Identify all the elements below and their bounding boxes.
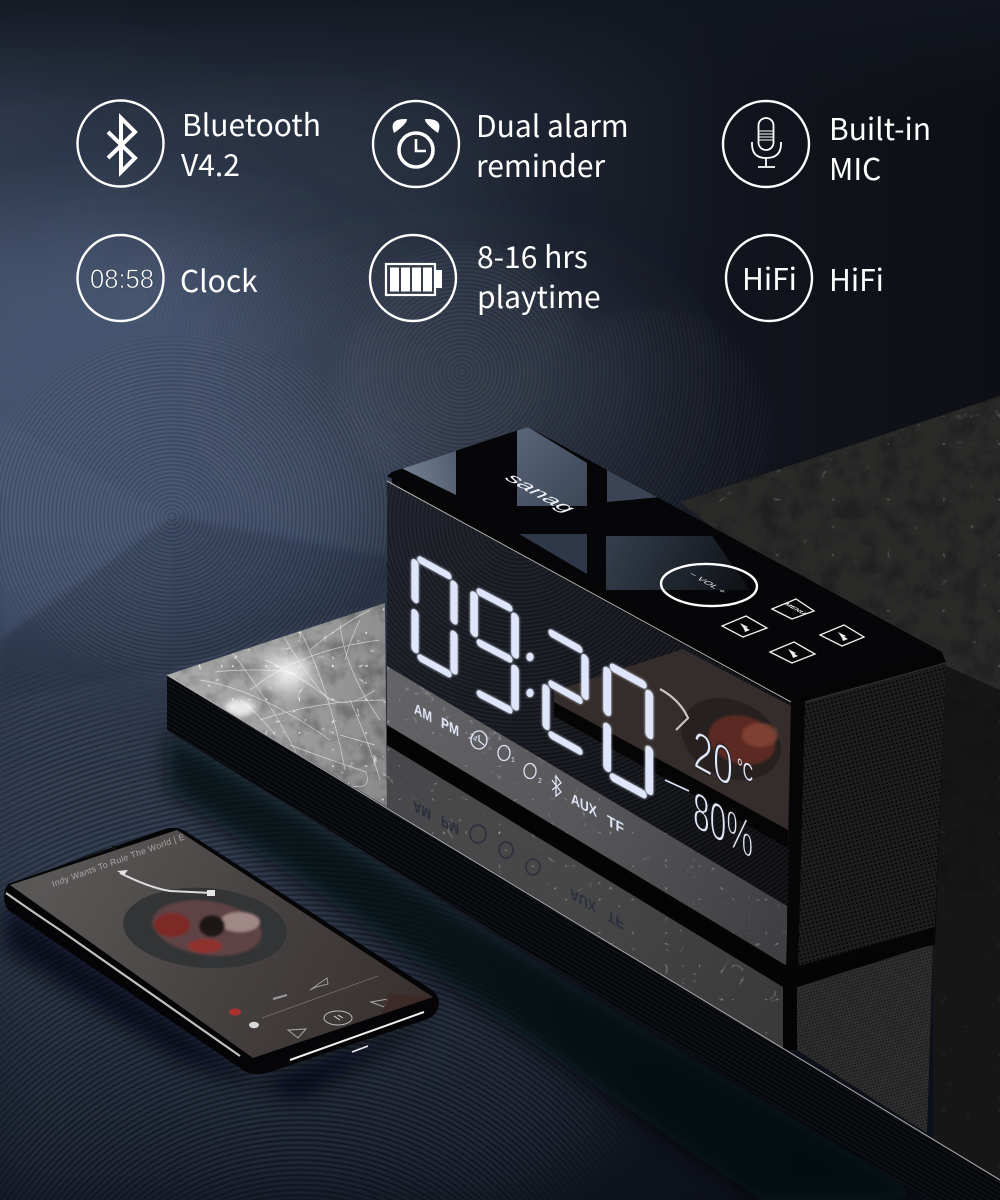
plinth shadow — [167, 730, 930, 1200]
reflected labels: AM — [413, 796, 431, 823]
marble reflected in display — [387, 666, 787, 966]
clock digits 09:20 — [415, 557, 649, 797]
reflection frame — [387, 725, 933, 1050]
speaker — [380, 427, 946, 970]
icon: digital clock — [78, 235, 164, 321]
touch keys — [722, 599, 864, 663]
icon: HiFi badge: HiFi — [742, 255, 797, 299]
reflected labels: PM — [441, 811, 459, 838]
display status labels — [414, 700, 624, 838]
feature: playtime — [370, 233, 601, 321]
display status labels: 24 — [467, 732, 480, 744]
feature: built-in MIC — [723, 101, 931, 189]
feature: Bluetooth: Bluetooth — [182, 101, 321, 145]
tonearm — [120, 873, 212, 893]
icon: alarm 1 — [498, 746, 510, 760]
phone highlights — [6, 893, 240, 1056]
plinth edge highlight — [167, 675, 1000, 1180]
phone — [4, 828, 440, 1100]
phone shadow — [5, 900, 440, 1100]
phone body — [4, 828, 439, 1074]
reflected labels: AUX — [570, 884, 596, 916]
play controls — [229, 976, 388, 1038]
plinth front face — [167, 675, 1000, 1200]
feature: built-in MIC: MIC — [829, 145, 881, 189]
speaker slot and camera — [83, 851, 104, 858]
temperature and humidity: 20 — [693, 718, 733, 800]
display status labels: 1 — [511, 757, 515, 764]
icon: battery — [370, 235, 456, 321]
icon: microphone — [723, 101, 809, 187]
feature: clock: Clock — [180, 257, 258, 301]
logo: sanag — [499, 472, 582, 515]
dark marble block behind speaker — [670, 390, 1000, 1200]
marble top — [160, 600, 390, 810]
display status labels: AM — [414, 700, 432, 727]
icon: 24h clock — [471, 731, 487, 749]
volume ring: − VOL + — [686, 572, 729, 595]
track title: Indy Wants To Rule The World | E — [51, 831, 186, 889]
feature: built-in MIC: Built-in — [829, 105, 931, 149]
feature: HiFi — [726, 235, 884, 321]
icon: bluetooth — [78, 100, 164, 186]
top bright edge — [387, 481, 791, 702]
top face — [387, 427, 940, 664]
side speaker grille — [786, 663, 946, 968]
record disc — [123, 888, 287, 968]
front display — [380, 470, 800, 970]
feature: Bluetooth: V4.2 — [181, 141, 240, 185]
speaker body — [387, 427, 946, 970]
feature: playtime: playtime — [477, 273, 601, 317]
feature: Bluetooth — [78, 100, 321, 186]
display status labels: AUX — [571, 790, 597, 821]
mirror plinth — [160, 600, 1000, 1200]
icon: bluetooth on display — [552, 776, 561, 796]
icon: alarm 2 — [524, 764, 536, 778]
reflected labels — [413, 796, 624, 933]
feature: clock — [78, 235, 258, 321]
temperature and humidity: 80% — [693, 778, 753, 870]
marble reflected in plinth — [387, 740, 787, 1050]
phone reflection — [554, 649, 791, 830]
reflected labels: TF — [607, 906, 624, 933]
phone screen — [10, 830, 433, 1058]
converging floor folds — [0, 420, 400, 700]
feature: playtime: 8-16 hrs — [477, 233, 588, 277]
feature: dual alarm — [373, 101, 629, 187]
top face: MENU — [782, 603, 807, 615]
icon: digital clock: 08:58 — [90, 264, 154, 294]
icon: HiFi badge — [726, 235, 812, 321]
temperature and humidity — [665, 718, 753, 870]
album art — [152, 899, 262, 957]
feature: dual alarm: reminder — [476, 142, 605, 186]
icon: alarm clock — [373, 101, 459, 187]
grille reflection — [797, 942, 933, 1133]
display status labels: PM — [441, 714, 459, 741]
feature: HiFi: HiFi — [829, 256, 884, 300]
display status labels: 2 — [538, 778, 542, 785]
temperature and humidity: °C — [737, 753, 753, 788]
volume ring — [660, 562, 758, 608]
feature: dual alarm: Dual alarm — [476, 102, 629, 146]
display status labels: TF — [607, 812, 624, 838]
